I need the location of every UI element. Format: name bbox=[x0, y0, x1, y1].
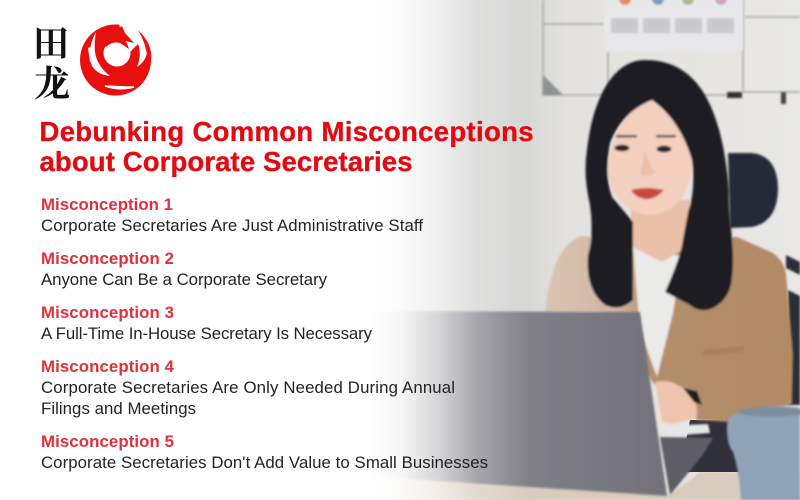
photo: woman working at laptop bbox=[360, 0, 800, 500]
misconception 1 bbox=[41, 195, 423, 235]
wall grid board bbox=[543, 0, 800, 104]
laptop bbox=[360, 311, 713, 496]
eyebrows and eyes bbox=[614, 135, 676, 152]
misconception 4: Filings and Meetings bbox=[41, 399, 196, 418]
wall poster bbox=[604, 0, 743, 51]
misconception 5: Misconception 5 bbox=[41, 432, 174, 451]
title: about Corporate Secretaries bbox=[40, 146, 412, 177]
desk bbox=[360, 472, 800, 500]
office chair bbox=[728, 153, 800, 405]
coffee mug bbox=[727, 406, 800, 500]
office wall bbox=[360, 0, 800, 500]
neck bbox=[630, 200, 690, 262]
emblem white cut-outs bbox=[88, 20, 147, 89]
misconception 1: Corporate Secretaries Are Just Administrative Staff bbox=[41, 216, 423, 235]
blazer bbox=[545, 236, 793, 422]
misconception 4: Corporate Secretaries Are Only Needed During Annual bbox=[41, 378, 455, 397]
misconception 3 bbox=[41, 303, 373, 343]
watch bbox=[683, 388, 702, 405]
misconception 5: Corporate Secretaries Don't Add Value to Small Businesses bbox=[41, 453, 488, 472]
nose bbox=[640, 150, 656, 176]
emblem thin right crescent bbox=[138, 30, 151, 76]
misconception 3: Misconception 3 bbox=[41, 303, 174, 322]
logo characters: 龙 bbox=[34, 56, 70, 107]
title bbox=[40, 116, 534, 177]
logo bbox=[33, 16, 151, 107]
emblem dragon head bbox=[100, 25, 134, 49]
phone bbox=[660, 424, 710, 436]
misconception 2: Misconception 2 bbox=[41, 249, 174, 268]
icon: red dragon emblem bbox=[80, 20, 151, 96]
title: Debunking Common Misconceptions bbox=[40, 116, 534, 147]
misconception 3: A Full-Time In-House Secretary Is Necessary bbox=[41, 324, 373, 343]
misconception 4: Misconception 4 bbox=[41, 357, 175, 376]
hand bbox=[655, 381, 697, 424]
misconception 1: Misconception 1 bbox=[41, 195, 173, 214]
face bbox=[608, 98, 692, 215]
logo characters: 田 bbox=[33, 16, 69, 67]
blazer pocket shade bbox=[702, 346, 745, 356]
misconception 5 bbox=[41, 432, 488, 472]
lips bbox=[631, 188, 664, 199]
misconception 4 bbox=[41, 357, 455, 418]
misconception 2: Anyone Can Be a Corporate Secretary bbox=[41, 270, 328, 289]
woman bbox=[545, 60, 793, 436]
desk mat bbox=[680, 420, 745, 472]
hair bbox=[586, 60, 733, 310]
shirt bbox=[633, 247, 682, 377]
logo characters bbox=[33, 16, 70, 107]
misconception 2 bbox=[41, 249, 328, 289]
